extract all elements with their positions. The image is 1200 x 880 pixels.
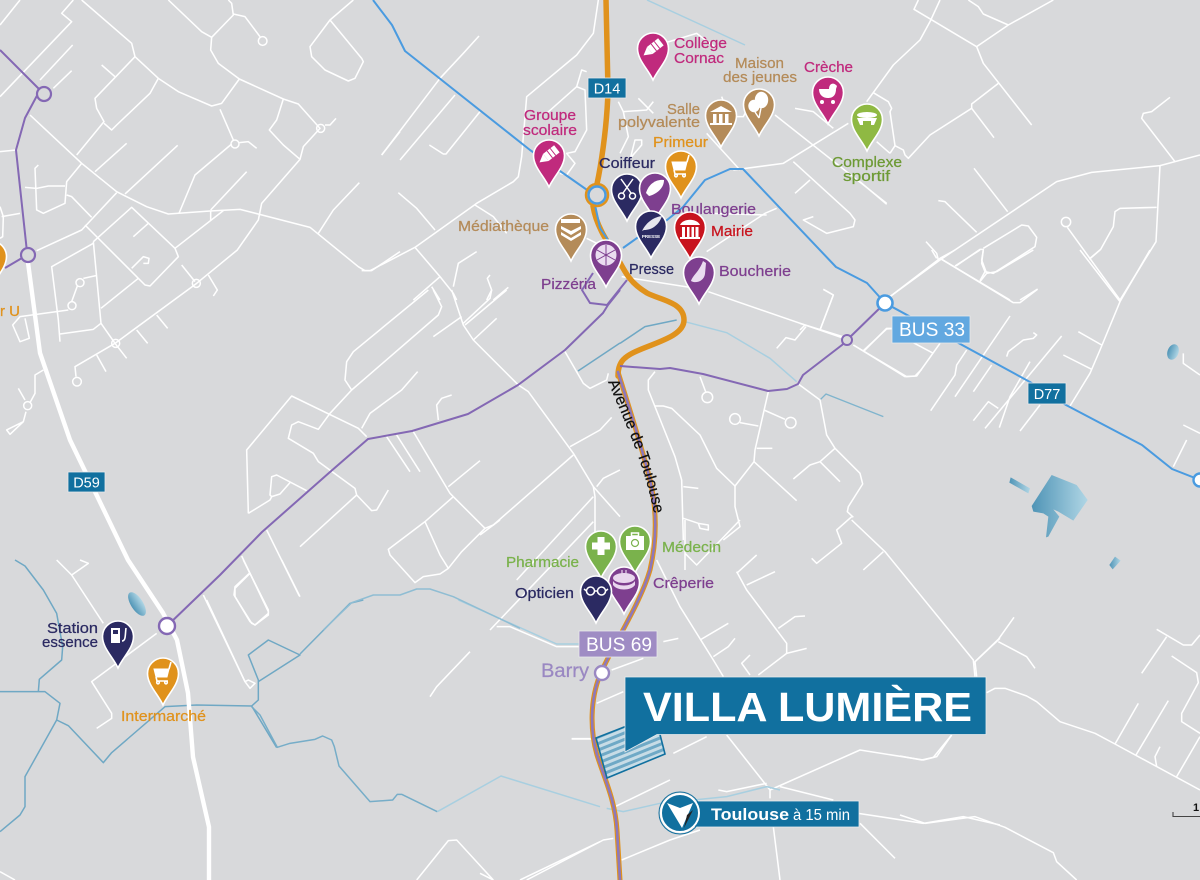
pin: Pizzéria: Pizzéria xyxy=(541,276,597,293)
destination: Toulouse à 15 min: Toulouse xyxy=(711,805,789,824)
callout: Villa Lumière xyxy=(625,677,986,752)
pin: Opticien xyxy=(515,576,612,623)
pin: Complexe sportif: Complexe xyxy=(832,154,902,171)
pin: Médecin: Médecin xyxy=(662,539,721,556)
pin: Maison des jeunes: des jeunes xyxy=(723,69,797,86)
pin: Presse: Presse xyxy=(629,261,674,278)
road label: Avenue de Toulouse: Avenue de Toulouse xyxy=(608,382,662,513)
bus stop: Barry: Barry xyxy=(541,661,590,682)
pin: Groupe scolaire: Groupe xyxy=(524,107,576,124)
pin: Coiffeur: Coiffeur xyxy=(599,155,655,172)
pin: Maison des jeunes: Maison xyxy=(735,55,784,72)
bus badge: BUS 69 xyxy=(579,631,657,657)
pin: Marché U: r U xyxy=(0,303,20,320)
road: D59 xyxy=(27,255,209,880)
bus badge: BUS 33 xyxy=(892,316,970,343)
pin: Médecin xyxy=(620,526,721,573)
pin: Primeur xyxy=(653,134,708,198)
scale bar xyxy=(1173,802,1200,816)
pin: Mairie xyxy=(674,212,753,259)
bus line 33 / D77 blue route xyxy=(373,0,1200,480)
pin: Médiathèque: Médiathèque xyxy=(458,218,549,235)
pin: Boucherie xyxy=(684,257,791,304)
pin: Presse: PRESSE xyxy=(642,234,660,239)
pin: Station essence: Station xyxy=(47,620,98,637)
pin: Primeur: Primeur xyxy=(653,134,708,151)
destination: Toulouse à 15 min: à 15 min xyxy=(793,807,850,824)
pin: Collège Cornac: Collège xyxy=(674,35,727,52)
road badge: D77: D77 xyxy=(1034,387,1060,403)
pin: Presse xyxy=(629,211,674,278)
bus stop: Barry xyxy=(541,661,609,682)
road: D14 avenue de Toulouse xyxy=(592,0,684,880)
pin: Collège Cornac xyxy=(638,33,727,80)
pin: Crèche xyxy=(804,59,853,124)
pin: Mairie: Mairie xyxy=(711,223,753,240)
pin: Pharmacie: Pharmacie xyxy=(506,554,579,571)
site parcel xyxy=(596,715,665,778)
bus badge: BUS 69: BUS 69 xyxy=(586,635,652,656)
pin: Boulangerie xyxy=(640,173,756,220)
pin: Salle polyvalente: Salle xyxy=(667,101,700,118)
pin: Médiathèque xyxy=(458,214,586,261)
roundabout and bus stops xyxy=(21,87,1200,634)
pin: Intermarché xyxy=(121,658,206,725)
pin: Station essence xyxy=(42,620,134,668)
pin: Complexe sportif xyxy=(832,104,902,185)
pin: Maison des jeunes xyxy=(723,55,797,136)
pin: Marché U xyxy=(0,241,20,320)
pin: Opticien: Opticien xyxy=(515,585,574,602)
pin: Boucherie: Boucherie xyxy=(719,263,791,280)
pin: Crêperie: Crêperie xyxy=(653,575,714,592)
pin: Coiffeur xyxy=(599,155,655,221)
pin: Crêperie xyxy=(608,567,714,614)
pin: Salle polyvalente: polyvalente xyxy=(618,114,700,131)
pin: Groupe scolaire: scolaire xyxy=(523,122,577,139)
pin: Complexe sportif: sportif xyxy=(843,168,891,185)
pin: Boulangerie: Boulangerie xyxy=(671,201,756,218)
pin: Salle polyvalente xyxy=(618,100,736,147)
pin: Intermarché: Intermarché xyxy=(121,708,206,725)
road badge: D77 xyxy=(1028,383,1066,404)
callout: Villa Lumière: VILLA LUMIÈRE xyxy=(643,684,972,730)
pin: Collège Cornac: Cornac xyxy=(674,50,725,67)
bus badge: BUS 33: BUS 33 xyxy=(899,320,965,341)
road badge: D14: D14 xyxy=(594,82,620,98)
scale bar: 1 xyxy=(1193,802,1199,814)
destination: Toulouse à 15 min xyxy=(659,792,859,834)
bus line 69 purple route xyxy=(0,50,885,626)
road badge: D59: D59 xyxy=(73,476,100,492)
pin: Station essence: essence xyxy=(42,634,98,651)
pin: Pharmacie xyxy=(506,531,616,578)
rivers xyxy=(0,0,883,832)
road badge: D14 xyxy=(588,78,626,98)
lakes xyxy=(125,343,1181,619)
pin: Groupe scolaire xyxy=(523,107,577,187)
road badge: D59 xyxy=(68,472,105,492)
pin: Crèche: Crèche xyxy=(804,59,853,76)
pin: Pizzéria xyxy=(541,240,622,293)
